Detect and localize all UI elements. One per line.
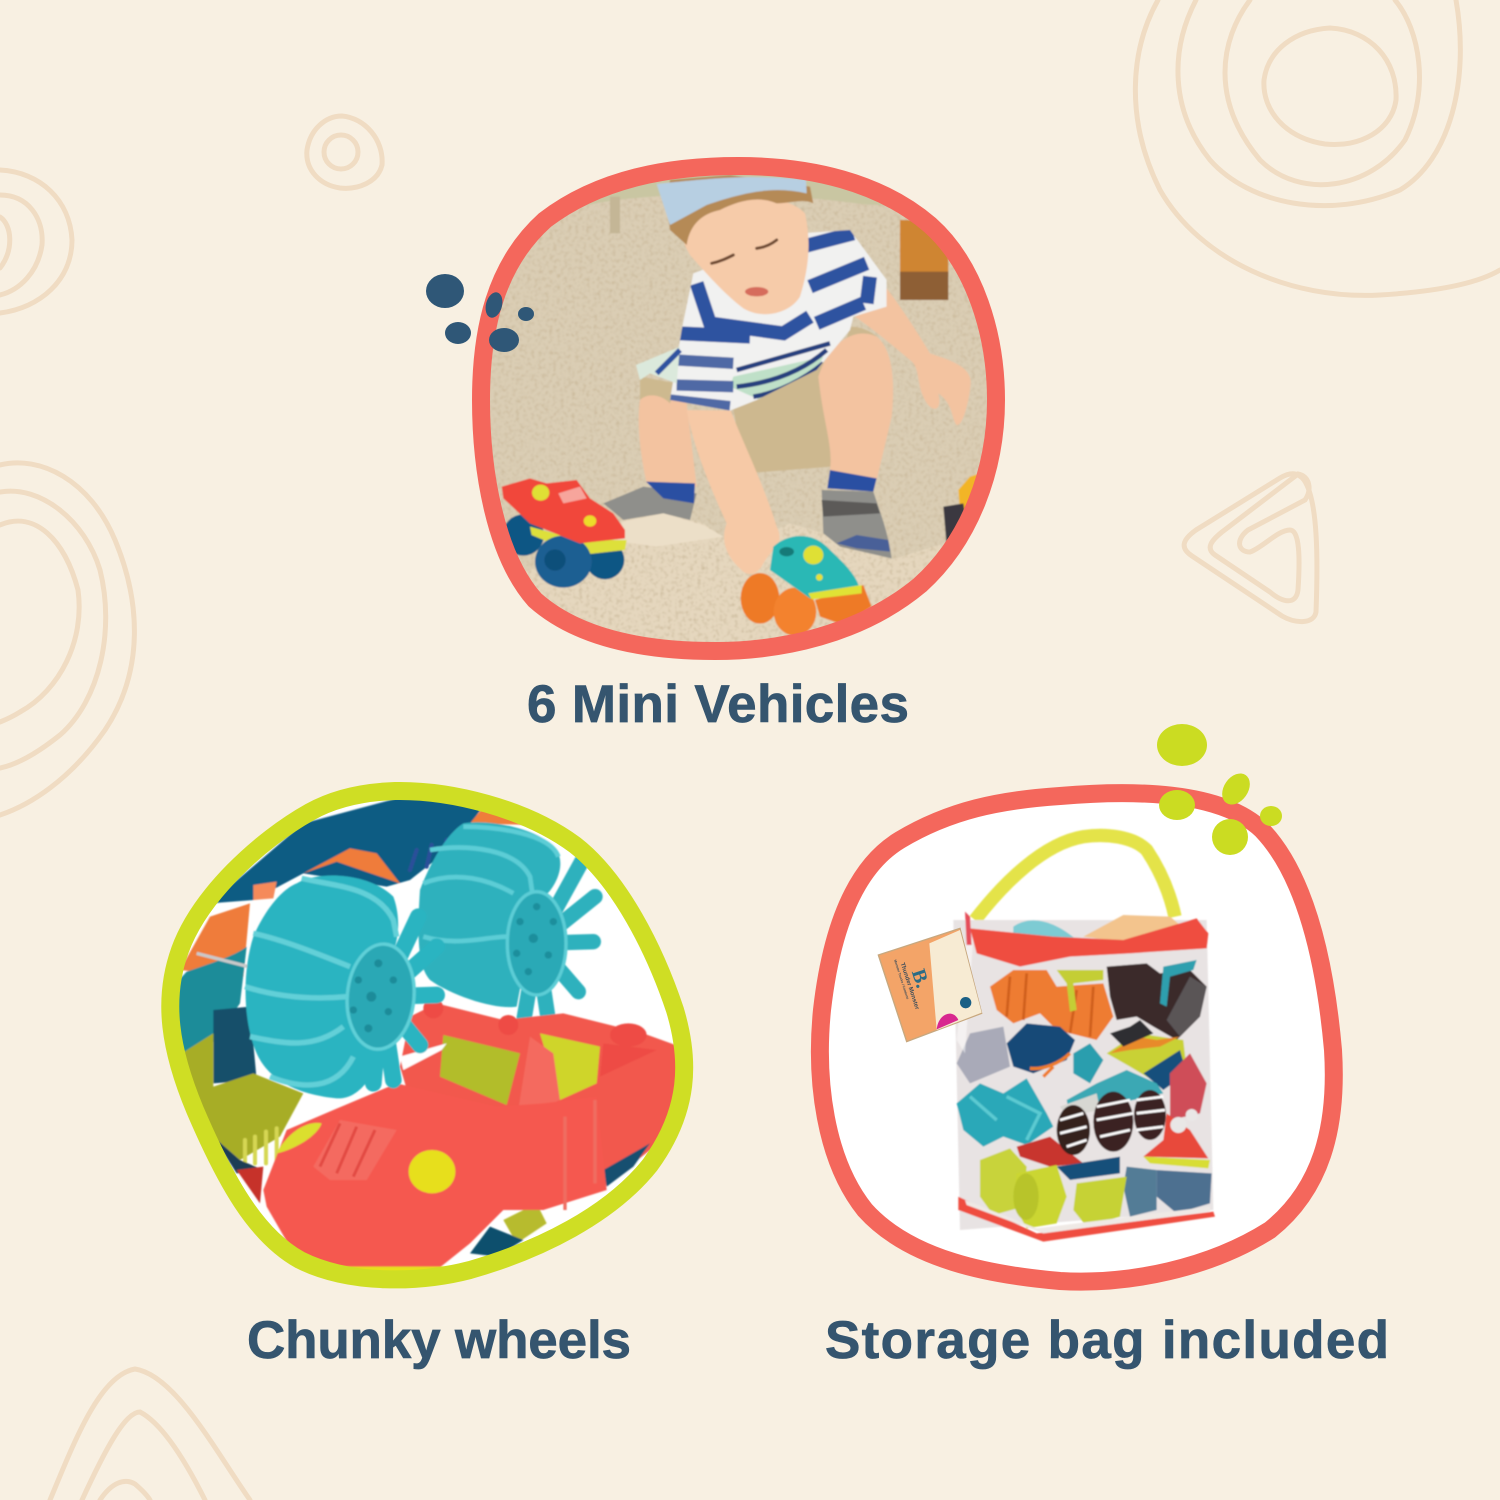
orange post: [900, 220, 948, 277]
sand mound: [526, 514, 944, 642]
left teal hub and orange: [180, 903, 250, 977]
shirt tail: [636, 347, 680, 383]
lime flame truck: [1107, 1033, 1187, 1087]
face: [681, 197, 809, 314]
teal toy: [957, 1078, 1053, 1147]
hang tag: Thunder Monster: [899, 962, 920, 1011]
clear highlight: [957, 937, 973, 1053]
front teal wheel: [245, 876, 437, 1098]
handle: [975, 835, 1175, 920]
left shoe mound: [610, 513, 723, 547]
hat: [657, 177, 807, 225]
caption: chunky wheels: Chunky wheels: [247, 1311, 631, 1370]
bottom seam: [958, 1197, 1215, 1242]
caption: storage bag included: Storage bag included: [825, 1311, 1389, 1370]
panel: chunky wheels: [150, 770, 710, 1370]
clear bag body: [953, 920, 1213, 1230]
lime wheels: [980, 1148, 1027, 1215]
right leg: [818, 333, 893, 480]
top contents: [1013, 920, 1077, 940]
grey toy and navy: [957, 1027, 1010, 1083]
red truck: [502, 478, 627, 588]
lower blue vehicle: [1057, 1157, 1120, 1180]
frame: coral blob: [481, 166, 996, 651]
reaching arm: [687, 410, 780, 574]
red truck bed: [398, 1004, 676, 1170]
yellow truck at edge: [958, 474, 977, 510]
navy chassis: [210, 797, 490, 903]
olive rear wheel: [213, 1007, 257, 1083]
red hood: [263, 1083, 607, 1270]
photo: child playing in sand: [490, 175, 987, 642]
dark toy: [1107, 963, 1207, 1040]
caption: 6 mini vehicles: 6 Mini Vehicles: [527, 675, 909, 734]
red toy pieces: [1170, 1053, 1207, 1120]
navy splash dots: [426, 274, 534, 352]
hang tag: Monster Trucks / Camions: [893, 959, 910, 1000]
photo: wheel close up: [179, 800, 676, 1270]
photo: clear storage bag: [878, 835, 1215, 1242]
lime splash dots: [1157, 724, 1282, 855]
left shoe: [603, 487, 697, 520]
hair: [667, 175, 813, 245]
panel: storage bag: [820, 724, 1389, 1370]
hang tag: [878, 928, 982, 1042]
shirt: [670, 229, 888, 411]
frame: coral blob with white fill: [820, 793, 1334, 1282]
left leg: [639, 390, 697, 487]
panel: 6 mini vehicles: [426, 150, 1010, 734]
right arm: [855, 288, 971, 425]
teal car: [741, 536, 872, 636]
back teal wheel: [418, 822, 595, 1023]
right shoe: [822, 490, 892, 558]
monster truck sticker: [1067, 1070, 1163, 1117]
frame: lime blob: [170, 791, 684, 1279]
zipper: [970, 918, 1208, 967]
orange toy: [990, 970, 1113, 1040]
hang tag: B.: [907, 966, 933, 991]
shorts: [732, 357, 832, 473]
